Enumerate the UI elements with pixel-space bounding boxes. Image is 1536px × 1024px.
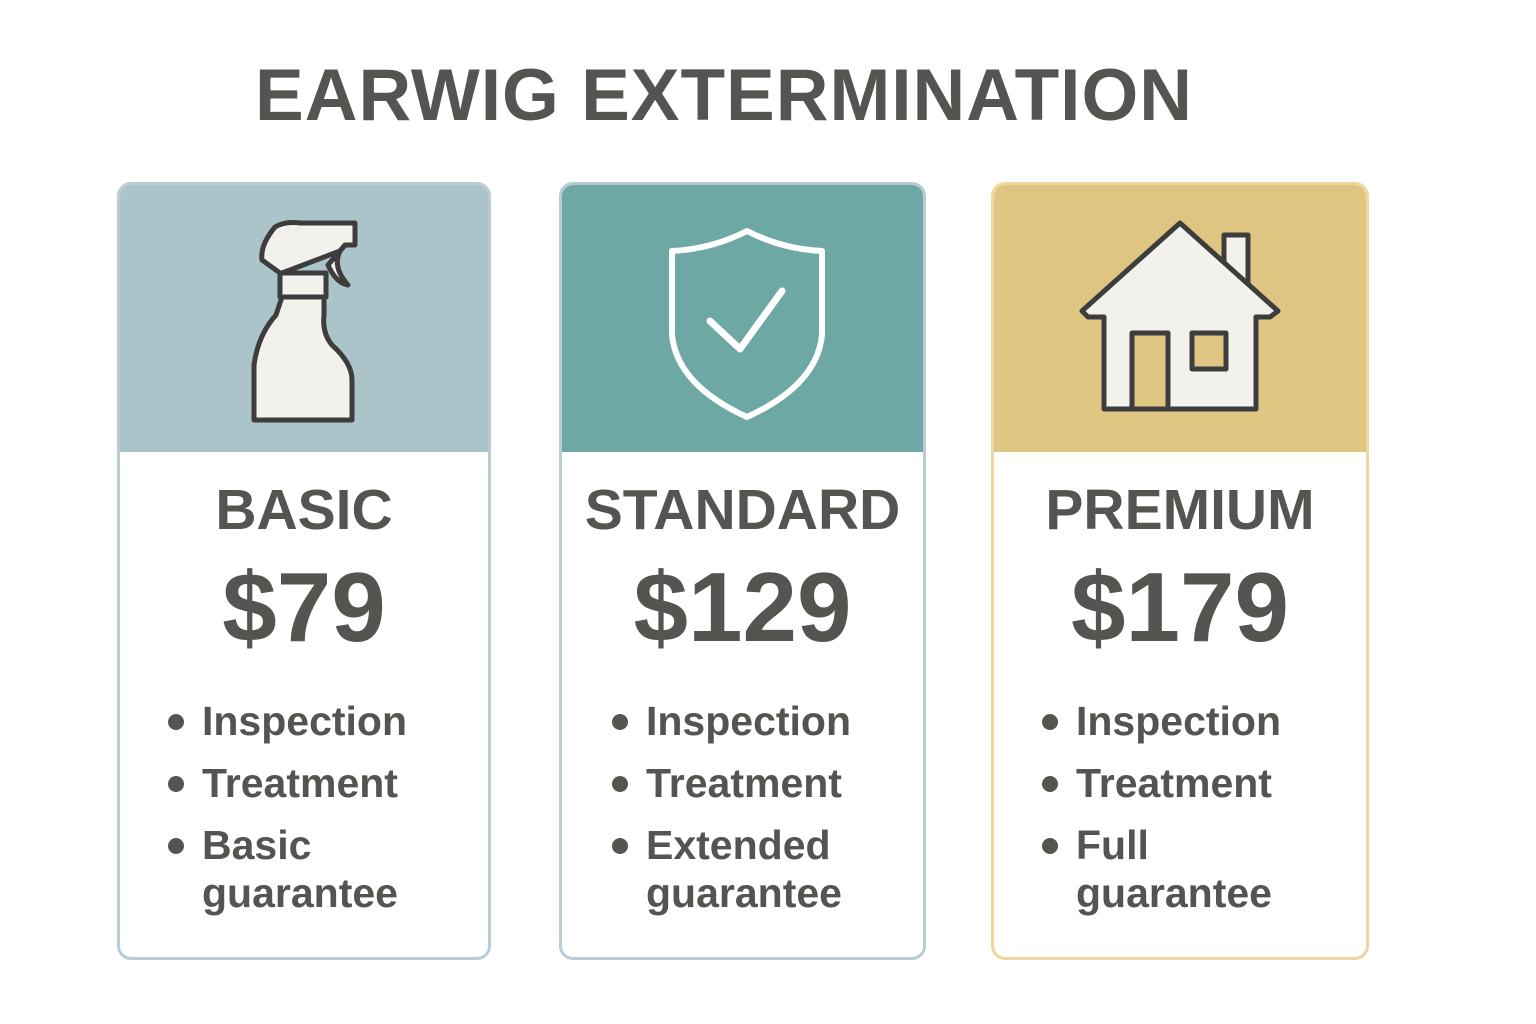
feature list: standard: Extended	[646, 822, 831, 868]
plan name: standard: STANDARD	[585, 478, 900, 542]
header: basic	[120, 185, 488, 452]
feature list: basic: Treatment	[202, 760, 398, 806]
feature list: standard: Treatment	[646, 760, 842, 806]
feature list: premium: Inspection	[1076, 698, 1281, 744]
feature list: standard: guarantee	[646, 870, 842, 916]
feature list: premium: Full	[1076, 822, 1149, 868]
panel: standard	[559, 182, 926, 960]
price: basic: $79	[222, 552, 386, 662]
panel: basic	[117, 182, 491, 960]
icon: house	[1080, 220, 1280, 412]
icon: spray bottle	[252, 220, 358, 422]
header: premium	[994, 185, 1366, 452]
feature list: standard: Inspection	[646, 698, 851, 744]
feature list: premium	[1042, 698, 1281, 916]
panel: premium	[991, 182, 1369, 960]
title: EARWIG EXTERMINATION	[255, 55, 1193, 136]
feature list: premium: guarantee	[1076, 870, 1272, 916]
plan name: premium: PREMIUM	[1045, 478, 1315, 542]
plan name: basic: BASIC	[215, 478, 393, 542]
price: standard: $129	[633, 552, 852, 662]
feature list: basic: guarantee	[202, 870, 398, 916]
feature list: basic: Basic	[202, 822, 311, 868]
header: standard	[562, 185, 923, 452]
icon: shield with check	[669, 228, 825, 420]
feature list: basic	[168, 698, 407, 916]
feature list: premium: Treatment	[1076, 760, 1272, 806]
price: premium: $179	[1071, 552, 1289, 662]
feature list: basic: Inspection	[202, 698, 407, 744]
feature list: standard	[612, 698, 851, 916]
